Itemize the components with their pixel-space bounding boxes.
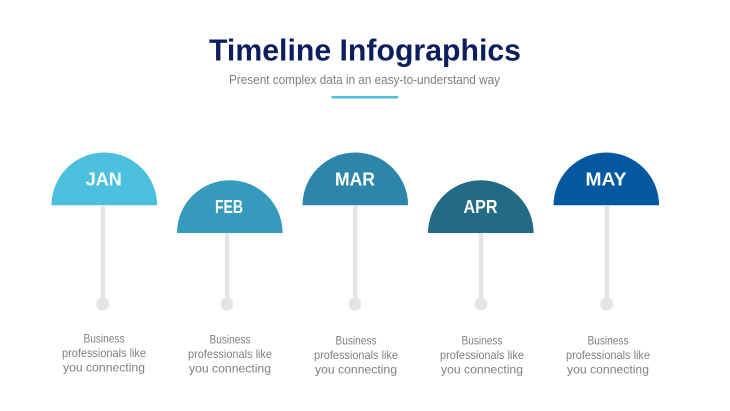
end dot: MAY [600,298,613,310]
description: MAR: Business [336,334,376,348]
description: FEB: Business [210,332,250,346]
stem: MAY [605,206,609,300]
description: MAY: you connecting [567,362,649,376]
stem: APR [479,233,483,300]
stem: FEB [225,233,229,300]
description: APR [440,334,524,376]
description: MAR: professionals like [314,348,398,362]
title: Timeline Infographics [209,32,521,68]
description: MAR: you connecting [315,362,397,376]
end dot: APR [474,298,488,310]
description: FEB [188,332,272,376]
description: JAN [62,332,146,374]
description: APR: you connecting [441,362,523,376]
stem: MAR [353,206,357,300]
timeline item: MAY [554,153,659,376]
dome: MAR [302,152,408,205]
timeline item: FEB [177,180,283,376]
timeline item: APR [428,180,534,376]
description: FEB: professionals like [188,347,272,361]
stem: JAN [101,206,105,300]
month label: MAR: MAR [335,170,375,190]
description: MAY: Business [588,334,628,348]
month label: FEB: FEB [215,197,243,217]
subtitle: Present complex data in an easy-to-understand way [229,73,501,87]
dome: MAY [554,153,659,205]
month label: APR: APR [464,197,498,217]
description: JAN: professionals like [62,346,146,360]
month label: JAN: JAN [86,170,122,190]
end dot: JAN [96,298,109,310]
description: MAY: professionals like [566,348,650,362]
title underline [332,96,398,98]
month label: MAY: MAY [586,170,626,190]
timeline item: MAR [302,152,408,376]
description: FEB: you connecting [189,362,271,376]
timeline item: JAN [52,152,157,374]
end dot: MAR [348,298,362,310]
description: JAN: Business [84,332,124,346]
description: MAY [566,334,650,376]
description: APR: Business [462,334,502,348]
description: APR: professionals like [440,348,524,362]
description: MAR [314,334,398,376]
dome: JAN [52,152,157,205]
end dot: FEB [220,298,234,310]
dome: APR [428,180,534,233]
dome: FEB [177,180,283,233]
description: JAN: you connecting [63,360,145,374]
